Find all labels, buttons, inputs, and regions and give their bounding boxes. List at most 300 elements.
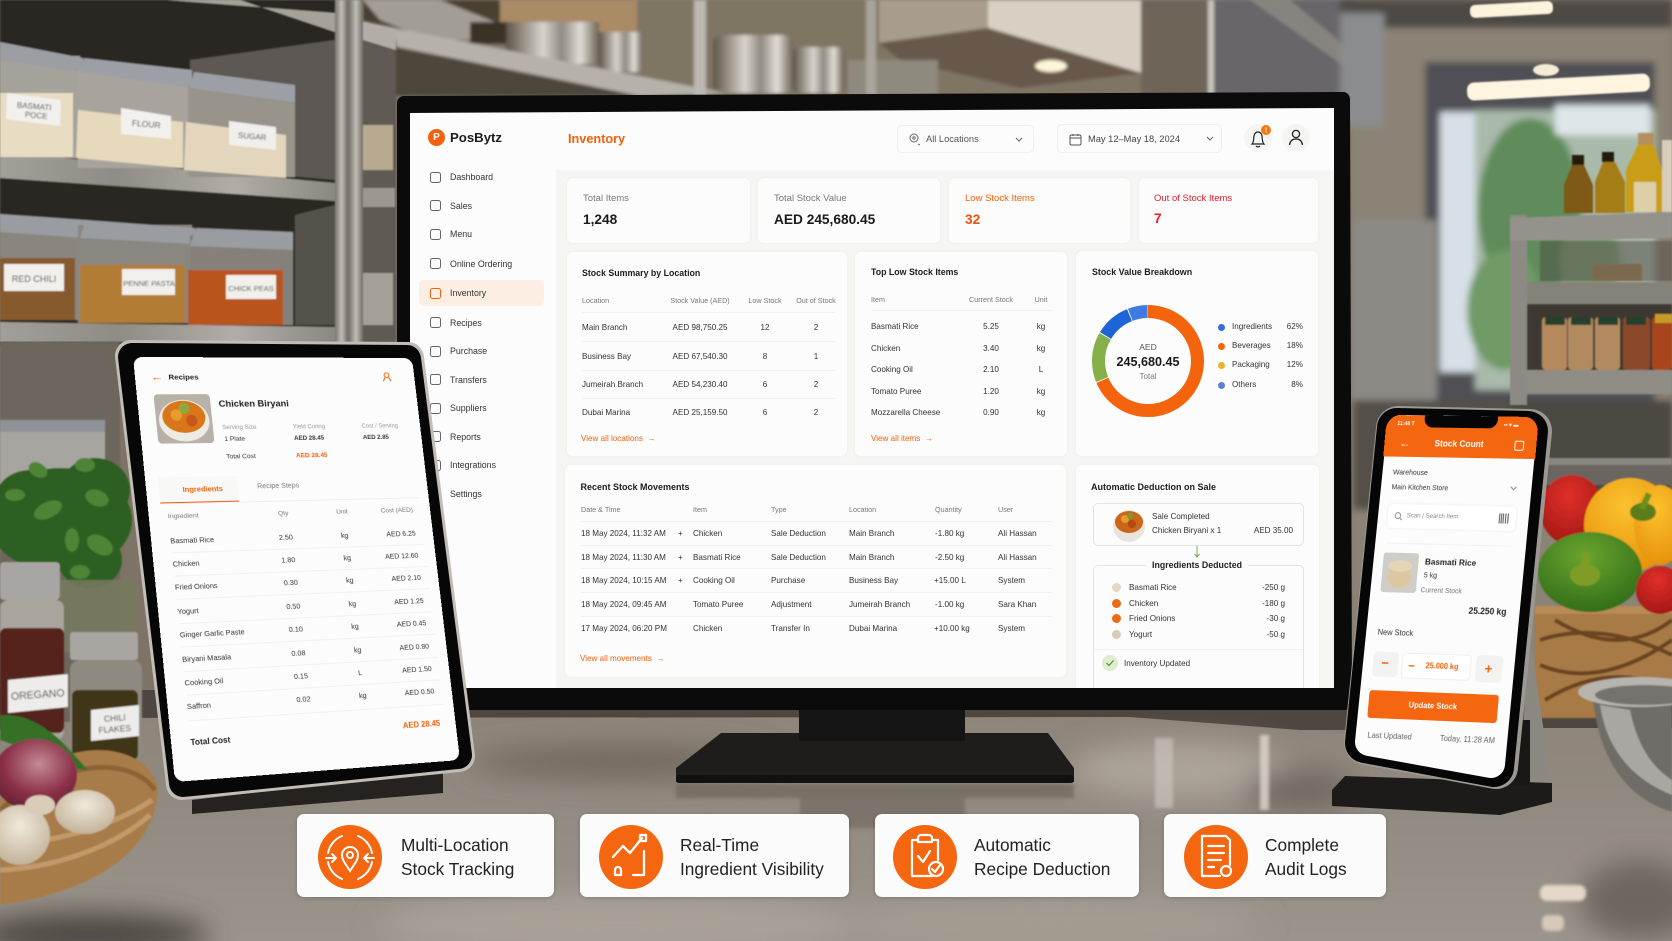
row: Jumeirah Branch xyxy=(582,380,818,389)
containers xyxy=(0,42,295,325)
legend: Beverages: 18% xyxy=(1287,341,1303,350)
table header: Location xyxy=(582,296,609,304)
nav: Transfers xyxy=(430,374,487,385)
container labels: POCE xyxy=(25,110,48,121)
icon: location network xyxy=(318,825,382,889)
label: oregano: OREGANO xyxy=(11,687,65,703)
KPI: Total Stock Value: AED 245,680.45 xyxy=(774,212,875,227)
table header: Item xyxy=(693,505,707,514)
nav: Integrations: Integrations xyxy=(450,460,496,470)
phone stand xyxy=(1320,640,1570,830)
app header: ▪▪ ▾ ▬ xyxy=(1504,423,1519,429)
heading: Recent Stock Movements xyxy=(580,482,690,492)
row 2: -2.50 kg xyxy=(935,552,964,562)
row 1: + xyxy=(678,528,683,538)
label: chili flakes xyxy=(91,705,139,741)
table header: Location xyxy=(849,505,876,514)
row: Total Cost xyxy=(171,719,456,751)
legend: Packaging xyxy=(1218,360,1303,369)
status: inventory updated: Inventory Updated xyxy=(1124,658,1190,668)
table header: Ingredient xyxy=(168,513,199,520)
row 4: Jumeirah Branch xyxy=(849,600,910,608)
nav: Reports xyxy=(434,431,481,442)
table header: Out of Stock xyxy=(796,296,836,304)
heading: Automatic Deduction on Sale xyxy=(1091,482,1216,492)
row 5: +10.00 kg xyxy=(934,624,970,632)
link: view all locations: View all locations → xyxy=(581,434,656,442)
row: Yogurt: Yogurt xyxy=(177,607,199,616)
KPI: Total Items: 1,248 xyxy=(583,212,617,227)
row: Dubai Marina: 6 xyxy=(763,408,767,417)
phone screen: stock count xyxy=(1356,415,1537,770)
KPI: Low Stock Items xyxy=(949,178,1130,243)
background: spice jars xyxy=(0,562,142,760)
recipe meta: 1 Plate xyxy=(224,436,245,443)
table header: User xyxy=(998,505,1013,514)
label: chili flakes: FLAKES xyxy=(98,723,132,735)
nav: Menu xyxy=(430,229,472,240)
update stock button: Update Stock xyxy=(1408,701,1457,711)
row: Chicken: -180 g xyxy=(1262,598,1285,608)
stepper control: 25.000 kg xyxy=(1425,661,1459,671)
row 5: Dubai Marina xyxy=(849,624,897,632)
warehouse selector: Main Kitchen Store xyxy=(1391,482,1449,492)
row: Biryani Masala: kg xyxy=(353,646,362,654)
row: Tomato Puree: 1.20 xyxy=(983,386,999,396)
row: Saffron: kg xyxy=(359,692,367,700)
row 3: 18 May 2024, 10:15 AM xyxy=(581,576,666,585)
row: Cooking Oil xyxy=(871,365,1043,374)
row: Mozzarella Cheese: kg xyxy=(1037,408,1045,417)
table header: Unit xyxy=(1035,294,1047,304)
table header xyxy=(581,505,1013,514)
screen title: Recipes xyxy=(168,372,199,381)
row 1: -1.80 kg xyxy=(935,528,964,538)
recipe meta: AED 28.45 xyxy=(294,435,325,442)
table header xyxy=(148,505,431,524)
KPI: Total Items xyxy=(567,178,750,243)
table header: Type xyxy=(771,505,787,514)
row: Saffron: AED 0.50 xyxy=(404,688,435,698)
table header: Low Stock xyxy=(748,296,782,304)
recipe meta: Yield Coring xyxy=(293,424,325,430)
row 3: Business Bay xyxy=(849,576,898,585)
row: Jumeirah Branch: 6 xyxy=(763,380,767,389)
row 3: +15.00 L xyxy=(934,576,966,585)
row 2: Ali Hassan xyxy=(998,552,1037,562)
app header xyxy=(1383,415,1539,459)
row: Basmati Rice xyxy=(151,527,434,548)
nav: Inventory: Inventory xyxy=(450,288,486,298)
panel: Recent Stock Movements xyxy=(565,465,1066,677)
date selector: May 12–May 18, 2024 xyxy=(1088,134,1180,144)
tablet stand xyxy=(0,0,520,830)
stepper control xyxy=(1371,651,1505,684)
panel: Stock Value Breakdown xyxy=(1076,251,1318,456)
recipe meta: AED 28.45 xyxy=(296,452,328,459)
container labels: CHICK PEAS xyxy=(228,284,274,293)
KPI: Low Stock Items: Low Stock Items xyxy=(965,192,1035,204)
row: Tomato Puree: Tomato Puree xyxy=(871,386,921,396)
notification bell xyxy=(1250,125,1271,148)
row: Cooking Oil xyxy=(165,662,450,691)
row 5: System xyxy=(998,624,1025,632)
update stock button xyxy=(1367,690,1499,723)
warehouse selector xyxy=(1391,466,1523,499)
KPI: Total Stock Value: Total Stock Value xyxy=(774,193,847,204)
product details: Basmati Rice xyxy=(1425,557,1477,568)
row 2: 18 May 2024, 11:30 AM xyxy=(581,552,666,562)
row: Yogurt: -50 g xyxy=(1267,630,1285,638)
row: Main Branch xyxy=(582,323,818,332)
recipe meta xyxy=(222,420,414,464)
badge: Automatic Recipe Deduction: Recipe Deduction xyxy=(974,859,1110,879)
table header: Unit xyxy=(336,509,348,516)
KPI: Total Stock Value xyxy=(758,178,940,243)
panel: Stock Summary by Location xyxy=(567,252,847,456)
ingredients deducted box xyxy=(1093,565,1304,695)
row: Yogurt: Yogurt xyxy=(1129,630,1152,638)
icon: clipboard check xyxy=(893,825,957,889)
donut chart xyxy=(1092,305,1204,417)
logo: PosBytz xyxy=(450,130,502,145)
nav: Sales: Sales xyxy=(450,200,472,210)
row 1: Ali Hassan xyxy=(998,528,1037,538)
row 2: Sale Deduction xyxy=(771,552,826,562)
row: Tomato Puree xyxy=(871,386,1045,396)
row: Saffron: Saffron xyxy=(187,702,211,712)
logo xyxy=(428,129,502,146)
row 1: Chicken xyxy=(693,528,722,538)
row: Cooking Oil: L xyxy=(358,669,363,677)
nav: Online Ordering: Online Ordering xyxy=(450,258,512,268)
row 5: Chicken xyxy=(693,624,722,632)
row: Chicken xyxy=(1076,598,1319,610)
row: Fried Onions: -30 g xyxy=(1267,614,1285,622)
legend: Beverages xyxy=(1218,341,1303,350)
icon: ribbon xyxy=(381,372,392,382)
monitor bezel xyxy=(404,99,1345,703)
app header: Stock Count xyxy=(1434,438,1484,449)
heading: ingredients deducted: Ingredients Deducted xyxy=(1152,560,1242,570)
row: Jumeirah Branch: Jumeirah Branch xyxy=(582,380,643,389)
warehouse selector: Warehouse xyxy=(1393,467,1428,477)
active nav highlight xyxy=(419,280,544,306)
row 4: Sara Khan xyxy=(998,600,1036,608)
table header: Current Stock xyxy=(969,294,1013,304)
nav: Inventory xyxy=(430,288,486,299)
icon: audit document xyxy=(1184,825,1248,889)
row 2: Main Branch xyxy=(849,552,894,562)
row: Ginger Garlic Paste: Ginger Garlic Paste xyxy=(179,628,245,640)
row: Ginger Garlic Paste xyxy=(160,617,444,643)
row 3 xyxy=(581,576,1025,585)
row: Chicken: Chicken xyxy=(172,559,200,568)
badge: Complete Audit Logs xyxy=(1164,814,1386,897)
row 1: Sale Deduction xyxy=(771,528,826,538)
icon: biryani bowl xyxy=(1113,510,1145,542)
row: Business Bay: 8 xyxy=(763,352,767,361)
row: Fried Onions xyxy=(1076,612,1319,624)
status: inventory updated xyxy=(1102,655,1212,671)
link: view all movements: View all movements → xyxy=(580,654,664,662)
table header: Item xyxy=(871,294,885,304)
recipe name: Chicken Biryani xyxy=(218,399,289,409)
row: Basmati Rice: kg xyxy=(1037,322,1045,331)
row: Basmati Rice: Basmati Rice xyxy=(1129,582,1177,592)
row: Main Branch: Main Branch xyxy=(582,323,627,332)
row: Cooking Oil: Cooking Oil xyxy=(184,677,224,687)
row: Basmati Rice: AED 6.25 xyxy=(386,529,416,538)
heading: Top Low Stock Items xyxy=(871,267,958,277)
sale completed box: Chicken Biryani x 1 xyxy=(1152,526,1221,535)
container labels: BASMATI xyxy=(17,101,52,112)
product details: 5 kg xyxy=(1423,570,1438,580)
row: Chicken xyxy=(871,344,1045,353)
row 5: 17 May 2024, 06:20 PM xyxy=(581,624,667,632)
nav: Recipes: Recipes xyxy=(450,318,482,328)
row: Fried Onions: kg xyxy=(346,577,354,585)
nav: Menu: Menu xyxy=(450,229,472,239)
tabs: Recipe Steps xyxy=(257,483,300,490)
row 1 xyxy=(581,528,1037,538)
row: Basmati Rice: -250 g xyxy=(1262,582,1285,592)
page title: Inventory xyxy=(568,132,625,146)
row: Dubai Marina: Dubai Marina xyxy=(582,408,630,417)
main content area xyxy=(556,170,1334,688)
label: Automatic xyxy=(974,835,1051,855)
app header: 11:48 T xyxy=(1397,421,1415,427)
row: Chicken: 1.80 xyxy=(281,556,296,564)
panel: Top Low Stock Items xyxy=(855,252,1067,456)
link: view all items: View all items → xyxy=(871,434,933,442)
location selector: All Locations xyxy=(926,134,979,144)
row 4: -1.00 kg xyxy=(935,600,964,608)
row: Yogurt xyxy=(1076,628,1319,640)
row: Business Bay: Business Bay xyxy=(582,352,631,361)
legend: Others: Others xyxy=(1232,380,1256,389)
badge: Automatic Recipe Deduction xyxy=(875,814,1139,897)
row: Mozzarella Cheese: Mozzarella Cheese xyxy=(871,408,940,417)
row: Dubai Marina: AED 25,159.50 xyxy=(673,408,727,417)
legend: Packaging: 12% xyxy=(1287,360,1303,369)
row: Biryani Masala xyxy=(162,639,447,667)
product details: Current Stock xyxy=(1420,585,1462,595)
row: Total Cost: Total Cost xyxy=(190,735,231,747)
row: Chicken xyxy=(153,549,436,571)
row: Cooking Oil: L xyxy=(1039,365,1043,374)
table header: Qty xyxy=(278,510,289,517)
row: Chicken: AED 12.60 xyxy=(385,552,419,561)
row: Main Branch: 2 xyxy=(814,323,818,332)
row 3: Cooking Oil xyxy=(693,576,735,585)
row: Saffron xyxy=(167,685,452,715)
app header: ← xyxy=(1399,436,1411,450)
search field xyxy=(1387,504,1517,531)
background: left lower containers and herbs xyxy=(0,342,135,722)
row: Chicken: Chicken xyxy=(871,344,900,353)
recipe meta: Cost / Serving xyxy=(361,424,398,430)
nav: Suppliers xyxy=(430,403,487,414)
legend: Beverages: Beverages xyxy=(1232,341,1271,350)
legend: Others: 8% xyxy=(1291,380,1303,389)
row: Dubai Marina xyxy=(582,408,818,417)
badge: Multi-Location Stock Tracking xyxy=(297,814,554,897)
last updated: Today, 11:28 AM xyxy=(1439,734,1495,745)
row: Ginger Garlic Paste: AED 0.45 xyxy=(396,619,427,629)
row: Ginger Garlic Paste: kg xyxy=(351,623,359,631)
row: Jumeirah Branch: 2 xyxy=(814,380,818,389)
recipe meta: AED 2.85 xyxy=(363,434,389,441)
arrow: sale to ingredients xyxy=(1193,546,1201,558)
row: Cooking Oil: 0.15 xyxy=(293,672,308,681)
badge: Multi-Location Stock Tracking: Stock Tracking xyxy=(401,859,514,879)
row 5: Transfer In xyxy=(771,624,810,632)
tablet screen: recipes xyxy=(133,357,460,782)
donut centre label: 245,680.45 xyxy=(1116,355,1180,369)
tablet body xyxy=(131,356,459,784)
donut centre label: AED xyxy=(1139,342,1157,352)
table header: Date & Time xyxy=(581,505,621,514)
row: Business Bay xyxy=(582,352,818,361)
row: Cooking Oil: 2.10 xyxy=(983,365,999,374)
icon: rising chart xyxy=(599,825,663,889)
row: Biryani Masala: AED 0.80 xyxy=(399,642,429,652)
row 5 xyxy=(581,624,1025,632)
nav: Sales xyxy=(430,200,472,211)
nav: Dashboard xyxy=(430,172,493,183)
container labels: PENNE PASTA xyxy=(123,279,175,288)
background: upper wall and hood xyxy=(0,0,1672,720)
row: Basmati Rice: Basmati Rice xyxy=(170,536,214,545)
row: Fried Onions xyxy=(155,572,439,595)
sale completed box xyxy=(1093,503,1304,546)
row 4: Adjustment xyxy=(771,600,812,608)
row: Chicken: Chicken xyxy=(1129,598,1158,608)
container labels xyxy=(4,93,276,299)
legend: Others xyxy=(1218,380,1303,389)
container labels: SUGAR xyxy=(238,131,267,142)
heading: Stock Summary by Location xyxy=(582,268,700,278)
badge: Real-Time Ingredient Visibility: Ingredient Visibility xyxy=(680,859,824,879)
row: Basmati Rice xyxy=(1076,582,1319,594)
row: Jumeirah Branch: AED 54,230.40 xyxy=(673,380,727,389)
legend: Ingredients xyxy=(1218,322,1303,331)
product photo xyxy=(1380,552,1419,593)
row: Mozzarella Cheese xyxy=(871,408,1045,417)
row: Tomato Puree: kg xyxy=(1037,386,1045,396)
row: Biryani Masala: Biryani Masala xyxy=(182,653,232,663)
top header bar xyxy=(568,124,1304,153)
row: Basmati Rice xyxy=(871,322,1045,331)
row: Chicken: 3.40 xyxy=(983,344,999,353)
nav: Recipes xyxy=(430,317,482,328)
row 1: 18 May 2024, 11:32 AM xyxy=(581,528,666,538)
row: Cooking Oil: AED 1.50 xyxy=(402,665,432,675)
row: Main Branch: AED 98,750.25 xyxy=(673,323,727,332)
label: Complete xyxy=(1265,835,1339,855)
notification bell: ! xyxy=(1265,128,1267,134)
row 2 xyxy=(581,552,1037,562)
label: oregano xyxy=(8,674,68,713)
table header: Stock Value (AED) xyxy=(670,296,730,304)
KPI: Total Items: Total Items xyxy=(583,193,629,204)
location selector xyxy=(897,125,1034,153)
row: Main Branch: 12 xyxy=(760,323,770,332)
stepper control: + xyxy=(1484,660,1493,677)
heading: Stock Value Breakdown xyxy=(1092,267,1192,277)
dashboard screen xyxy=(410,113,1334,688)
tabs: Ingredients xyxy=(182,484,223,494)
row: Fried Onions: AED 2.10 xyxy=(391,574,421,583)
row: Yogurt: AED 1.25 xyxy=(394,597,424,606)
nav: Transfers: Transfers xyxy=(450,374,487,384)
row: Basmati Rice: 5.25 xyxy=(983,322,999,331)
row: Business Bay: 1 xyxy=(814,352,818,361)
row: Basmati Rice: 2.50 xyxy=(278,533,293,541)
background: basket with onions and garlic xyxy=(0,715,158,905)
row: Basmati Rice: Basmati Rice xyxy=(871,322,919,331)
table header xyxy=(871,294,1048,304)
last updated xyxy=(1367,730,1495,747)
row 2: Basmati Rice xyxy=(693,552,741,562)
nav: Purchase: Purchase xyxy=(450,346,487,356)
row 4: Tomato Puree xyxy=(693,600,743,608)
background: counter surface xyxy=(0,690,1672,941)
donut centre label: Total xyxy=(1140,372,1156,381)
row: Fried Onions: Fried Onions xyxy=(175,582,218,592)
background: left shelves with storage containers xyxy=(0,0,396,345)
nav: Suppliers: Suppliers xyxy=(450,403,487,413)
container labels: RED CHILI xyxy=(12,274,56,284)
sale completed box: AED 35.00 xyxy=(1254,526,1293,535)
date selector xyxy=(1057,124,1222,153)
product details: 25.250 kg xyxy=(1468,606,1507,617)
row: Dubai Marina: 2 xyxy=(814,408,818,417)
row 3: System xyxy=(998,576,1025,585)
badge: Real-Time Ingredient Visibility xyxy=(580,814,849,897)
row: Chicken: kg xyxy=(1037,344,1045,353)
row: Mozzarella Cheese: 0.90 xyxy=(983,408,999,417)
nav: Online Ordering xyxy=(430,258,512,269)
row 2: + xyxy=(678,552,683,562)
legend: Ingredients: 62% xyxy=(1287,322,1303,331)
KPI: Out of Stock Items xyxy=(1139,178,1318,243)
tabs xyxy=(158,473,419,504)
nav: Settings: Settings xyxy=(450,488,482,498)
product details xyxy=(1418,554,1513,619)
row: Cooking Oil: Cooking Oil xyxy=(871,365,913,374)
label: Real-Time xyxy=(680,835,759,855)
background: peppers, basket and steel bowl xyxy=(1530,465,1672,812)
sale completed box: Sale Completed xyxy=(1152,512,1210,521)
user avatar xyxy=(1288,130,1304,146)
table header xyxy=(582,296,836,304)
logo: P xyxy=(433,132,440,143)
last updated: Last Updated xyxy=(1367,731,1412,742)
recipe meta: Total Cost xyxy=(226,453,256,460)
nav: Purchase xyxy=(430,346,487,357)
label: Multi-Location xyxy=(401,835,509,855)
badge: Complete Audit Logs: Audit Logs xyxy=(1265,859,1347,879)
stepper control: − xyxy=(1381,655,1390,671)
KPI: Out of Stock Items: Out of Stock Items xyxy=(1154,192,1232,204)
search field: Scan / Search Item xyxy=(1406,512,1459,520)
recipe meta: Serving Size xyxy=(222,425,257,431)
panel: Automatic Deduction on Sale xyxy=(1076,465,1319,695)
phone body xyxy=(1320,390,1570,810)
dish photo xyxy=(154,394,215,444)
